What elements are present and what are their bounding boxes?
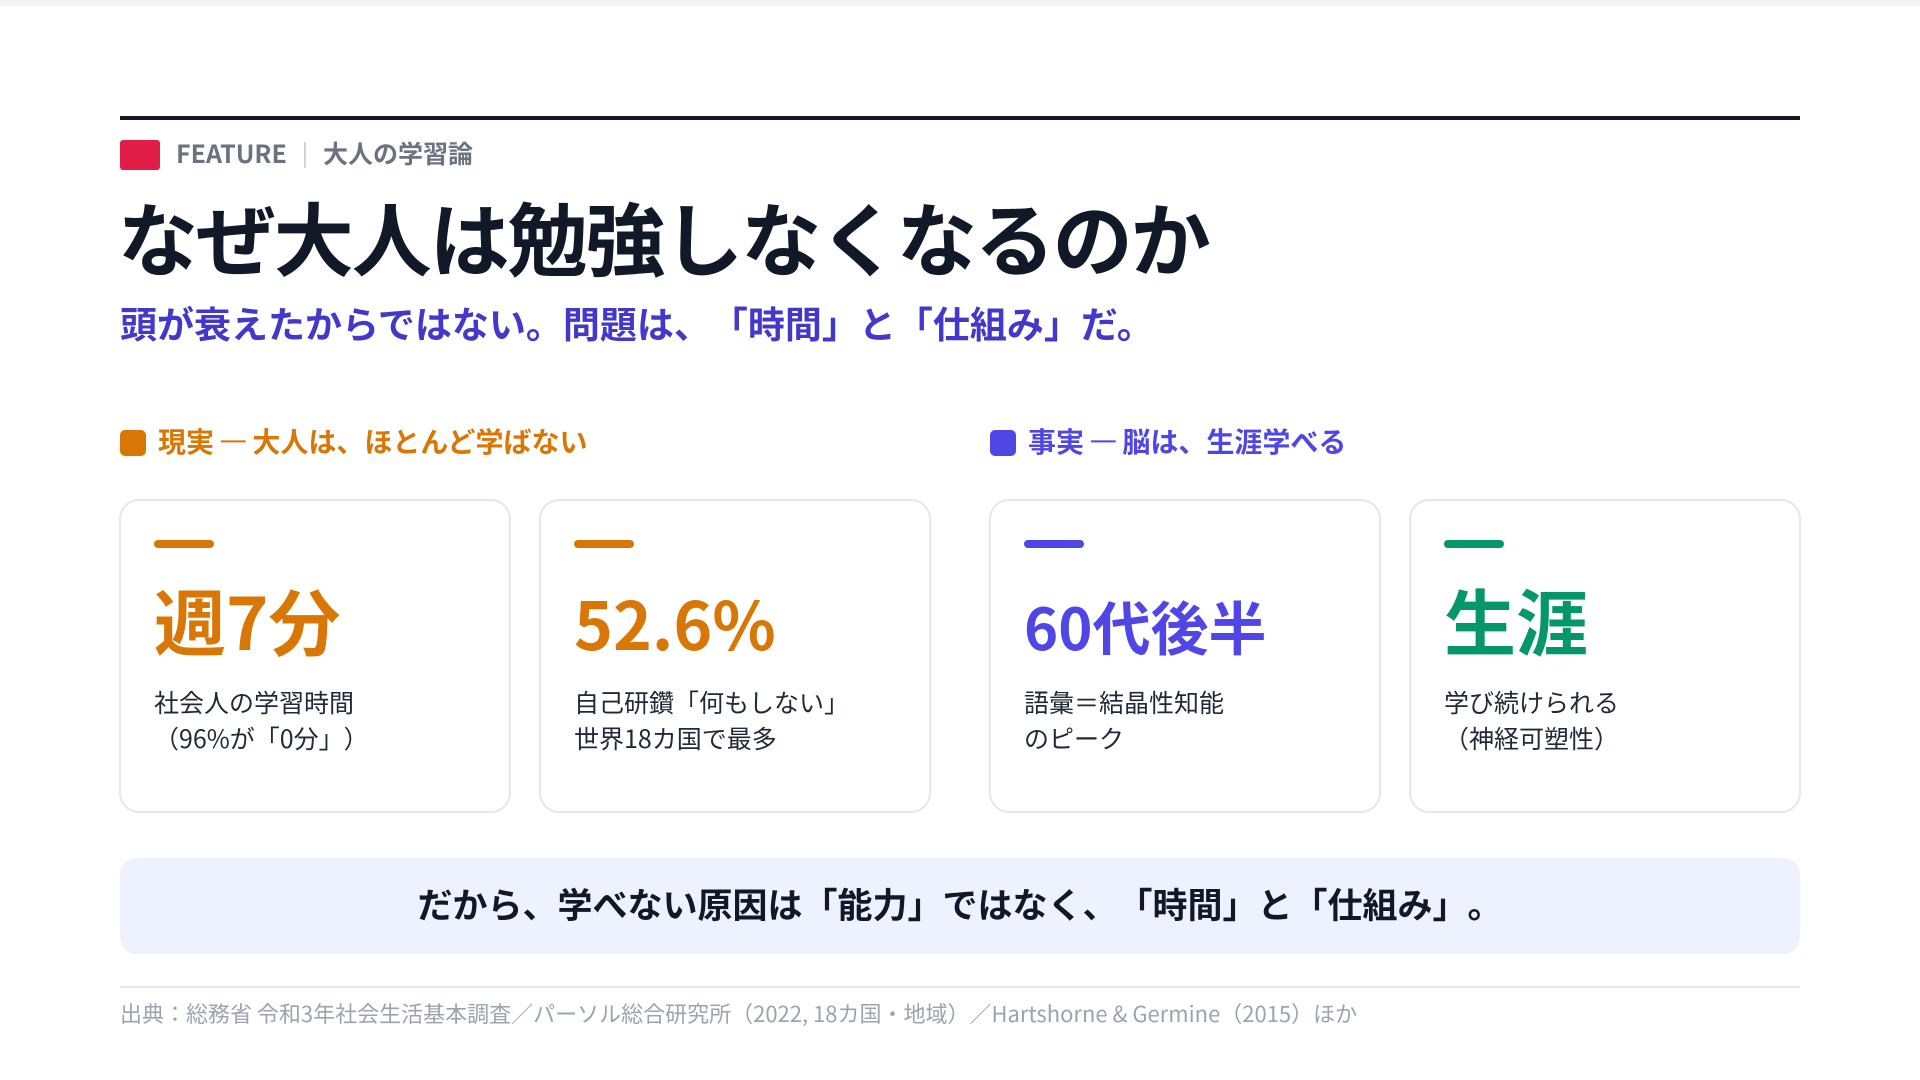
panel: card weekly minutes xyxy=(119,499,511,813)
accent bar xyxy=(1444,540,1504,548)
panel: card 52.6 percent xyxy=(539,499,931,813)
description: 社会人の学習時間 xyxy=(154,684,354,720)
footer divider xyxy=(120,986,1800,988)
panel: card lifelong xyxy=(1409,499,1801,813)
icon: red tag xyxy=(120,140,160,170)
description xyxy=(574,684,849,756)
section heading: reality xyxy=(120,421,588,461)
description: 世界18カ国で最多 xyxy=(574,720,777,756)
accent bar xyxy=(574,540,634,548)
heading text: 事実 — 脳は、生涯学べる xyxy=(1028,421,1346,461)
top rule xyxy=(120,116,1800,120)
accent bar xyxy=(154,540,214,548)
top strip xyxy=(0,0,1920,6)
panel: card late 60s xyxy=(989,499,1381,813)
description: のピーク xyxy=(1024,720,1124,756)
callout xyxy=(120,858,1800,954)
icon: orange square xyxy=(120,430,146,456)
description: 自己研鑽「何もしない」 xyxy=(574,684,849,720)
description: （96%が「0分」） xyxy=(154,720,369,756)
subtitle: 頭が衰えたからではない。問題は、「時間」と「仕組み」だ。 xyxy=(120,295,1154,349)
big stat: 週7分 xyxy=(154,566,340,671)
description: （神経可塑性） xyxy=(1444,720,1619,756)
big stat: 60代後半 xyxy=(1024,583,1266,667)
icon: indigo square xyxy=(990,430,1016,456)
big stat: 生涯 xyxy=(1444,566,1588,671)
description: 学び続けられる xyxy=(1444,684,1619,720)
kicker text: topic: 大人の学習論 xyxy=(323,135,473,171)
kicker divider xyxy=(304,142,306,168)
description xyxy=(1444,684,1619,756)
heading text: 現実 — 大人は、ほとんど学ばない xyxy=(158,421,588,461)
callout: だから、学べない原因は「能力」ではなく、「時間」と「仕組み」。 xyxy=(417,878,1502,929)
description xyxy=(1024,684,1224,756)
accent bar xyxy=(1024,540,1084,548)
kicker xyxy=(120,135,473,171)
description: 語彙＝結晶性知能 xyxy=(1024,684,1224,720)
big stat: 52.6% xyxy=(574,574,776,670)
kicker text: feature: FEATURE xyxy=(176,135,287,171)
description xyxy=(154,684,369,756)
source note: 出典：総務省 令和3年社会生活基本調査／パーソル総合研究所（2022, 18カ国・地域）／Hartshorne & Germine（2015）ほか xyxy=(120,997,1357,1029)
section heading: fact xyxy=(990,421,1346,461)
title: なぜ大人は勉強しなくなるのか xyxy=(118,178,1209,294)
